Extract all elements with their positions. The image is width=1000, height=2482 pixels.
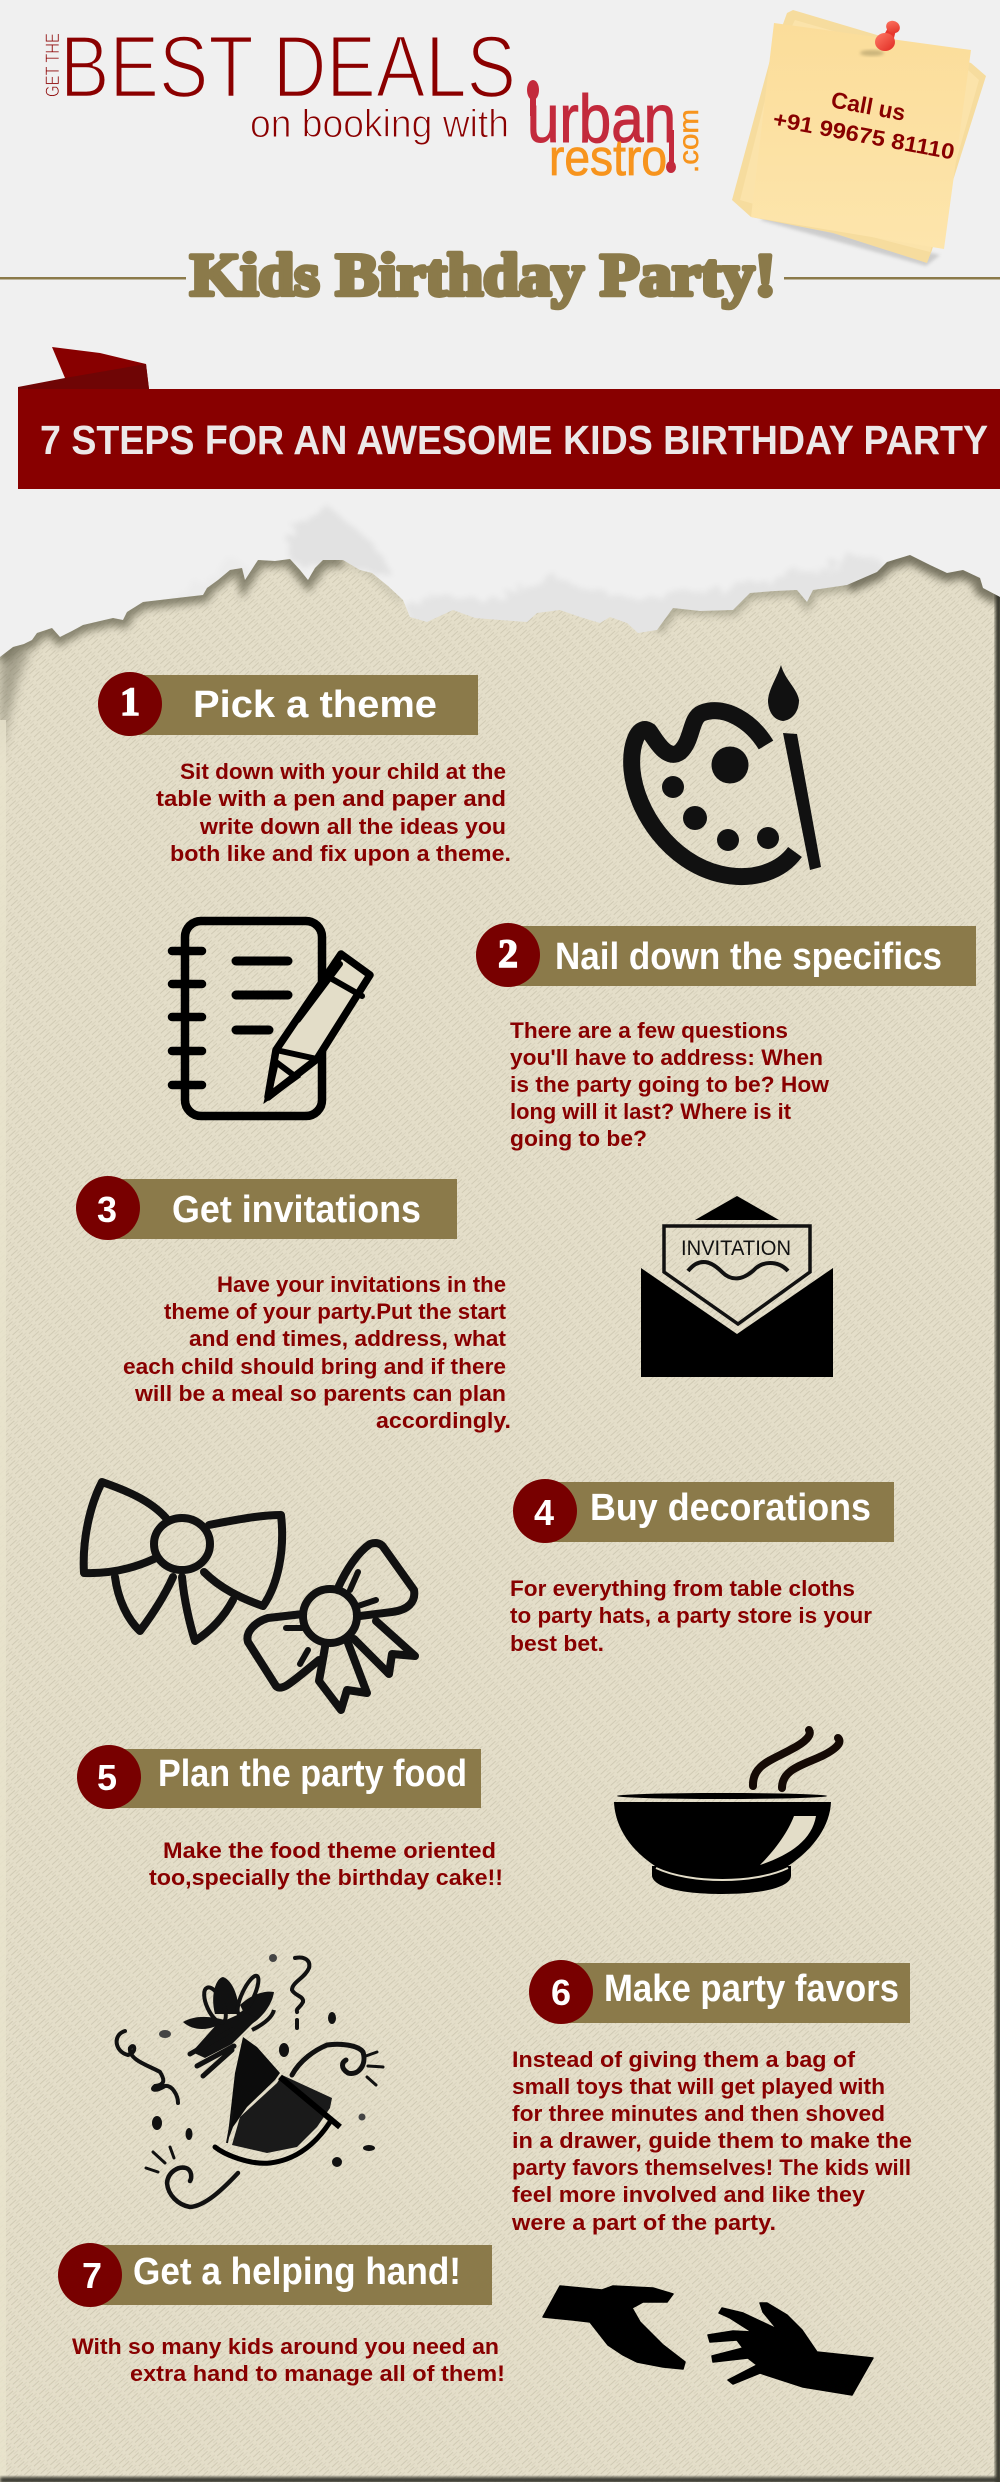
step 5 text: too,specially the birthday cake!! [149,1865,503,1890]
step 2 text: long will it last? Where is it [510,1099,792,1124]
note back sheet [732,10,986,263]
step 6 number [529,1960,593,2024]
step 6 text: Instead of giving them a bag of [512,2047,856,2072]
banner bar [18,389,1000,489]
step 5 heading: Plan the party food [158,1753,467,1795]
logo word: .com: .com [673,109,704,173]
step 3 text [123,1272,511,1433]
step 1 text: write down all the ideas you [199,814,506,839]
step 3 text: and end times, address, what [189,1326,507,1351]
logo spoon [527,80,539,116]
streamers [117,1957,383,2207]
title rule right [784,277,1000,280]
call us: Call us [829,86,908,126]
torn paper smudges [160,505,890,642]
phone number: +91 99675 81110 [771,106,957,164]
step 5 [77,1745,503,1890]
step 2 number [476,923,540,987]
step 6 text: small toys that will get played with [512,2074,885,2099]
step 1 text: table with a pen and paper and [156,786,506,811]
step 4 heading bar [545,1482,894,1542]
step 7 number: 7 [82,2255,102,2296]
note shadow [760,215,940,266]
step 5 text [149,1838,503,1890]
step 1 number: 1 [120,679,140,724]
torn paper background [0,555,1000,2482]
step 3 text: accordingly. [376,1408,511,1433]
small bow [247,1543,415,1710]
logo word: restro: restro [549,129,667,186]
step 2 text: There are a few questions [510,1018,788,1043]
icon: invitation envelope [641,1196,833,1377]
step 5 number [77,1745,141,1809]
icon: palette and brush [632,665,821,877]
step 5 heading bar [109,1749,481,1808]
tagline: best deals: BEST DEALS [60,17,516,116]
step 5 text: Make the food theme oriented [163,1838,496,1863]
step 2 text: you'll have to address: When [510,1045,823,1070]
step 1 heading: Pick a theme [193,684,437,726]
step 6 text [511,2047,912,2235]
confetti [152,1954,375,2167]
step 7 number [58,2243,122,2307]
step 1 text [156,759,511,866]
step 3 text: theme of your party.Put the start [164,1299,507,1324]
banner flag [52,347,149,389]
step 6 text: in a drawer, guide them to make the [512,2128,912,2153]
step 2 heading bar [508,926,976,986]
step 4 text: best bet. [510,1631,604,1656]
title rule left [0,277,186,280]
step 7 text: With so many kids around you need an [72,2334,499,2359]
icon: invitation envelope: INVITATION [681,1237,791,1260]
logo: urbanrestro.com [527,80,704,186]
step 3 number: 3 [97,1189,117,1230]
step 3 text: Have your invitations in the [217,1272,506,1297]
icon: helping hands [543,2286,873,2395]
logo fork [666,130,676,173]
title: Kids Birthday Party! [190,242,776,308]
icon: party hat with confetti [117,1954,383,2207]
step 3 heading: Get invitations [172,1189,421,1231]
step 4 number [513,1479,577,1543]
step 4 text: For everything from table cloths [510,1576,855,1601]
header: best deals tagline [43,17,516,146]
step 3 number [76,1176,140,1240]
icon: notebook and pencil [172,921,370,1116]
note middle sheet [740,20,979,252]
step 4 text [510,1576,872,1656]
step 2 heading: Nail down the specifics [555,936,942,978]
step 1 number [98,672,162,736]
step 6 [511,1960,912,2235]
step 4 text: to party hats, a party store is your [510,1603,872,1628]
step 2 number: 2 [498,931,518,976]
sticky note with phone number [732,10,986,266]
large bow [84,1482,282,1641]
step 4 heading: Buy decorations [590,1487,871,1529]
step 6 number: 6 [551,1972,571,2013]
step 7 text [72,2334,505,2386]
flower [183,1973,274,2076]
step 6 text: party favors themselves! The kids will [512,2155,911,2180]
step 3 heading bar [108,1179,457,1239]
step 1 text: Sit down with your child at the [180,759,506,784]
step 2 text: is the party going to be? How [510,1072,830,1097]
step 6 text: were a part of the party. [511,2210,776,2235]
step 2 [476,923,976,1151]
step 1 heading bar [130,675,478,735]
hat [215,2037,340,2163]
step 5 number: 5 [97,1757,117,1798]
tagline: on booking with: on booking with [250,103,509,146]
icon: bows [84,1482,415,1710]
banner fold [18,364,149,392]
step 7 [58,2243,505,2386]
icon: steaming bowl [614,1730,839,1894]
step 2 text: going to be? [510,1126,647,1151]
step 2 text [510,1018,830,1151]
step 7 heading bar [90,2245,492,2305]
pin [860,19,902,56]
step 4 number: 4 [534,1492,554,1533]
step 3 text: will be a meal so parents can plan [134,1381,506,1406]
logo word: urban: urban [527,81,676,157]
step 1 [98,672,511,866]
banner [18,347,1000,489]
step 6 text: for three minutes and then shoved [512,2101,885,2126]
step 7 text: extra hand to manage all of them! [130,2361,505,2386]
step 3 text: each child should bring and if there [123,1354,506,1379]
step 7 heading: Get a helping hand! [133,2251,461,2293]
step 3 [76,1176,511,1433]
step 6 text: feel more involved and like they [512,2182,866,2207]
tagline: get the: GET THE [43,33,64,97]
step 6 heading: Make party favors [604,1968,899,2010]
step 4 [510,1479,894,1656]
step 6 heading bar [561,1963,910,2023]
step 1 text: both like and fix upon a theme. [170,841,511,866]
note front sheet [751,23,971,249]
